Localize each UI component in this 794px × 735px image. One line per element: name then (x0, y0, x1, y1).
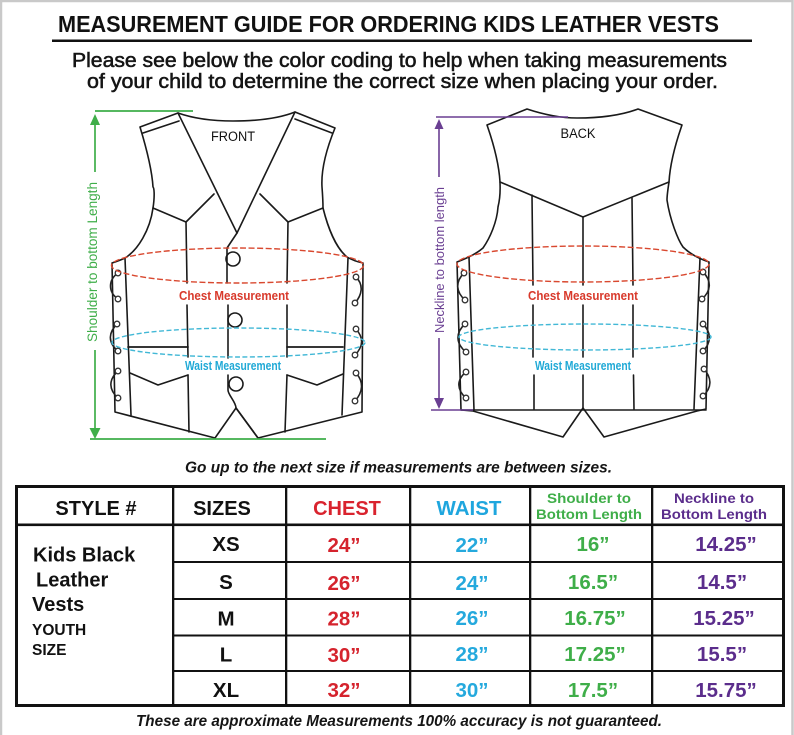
vest front side laces (110, 270, 362, 404)
size table (15, 485, 785, 707)
table header row: Bottom Length (661, 506, 767, 522)
shoulder length column: 17.5” (568, 679, 618, 702)
shoulder to bottom arrow (85, 111, 326, 439)
waist column: 28” (455, 643, 489, 666)
chest column (327, 534, 361, 702)
table header row: SIZES (193, 498, 251, 520)
neckline length column: 14.5” (697, 571, 747, 594)
chest column: 24” (327, 534, 361, 557)
table header row: WAIST (437, 497, 502, 520)
label: BACK: BACK (560, 126, 596, 141)
vest back outline (457, 109, 709, 437)
style description: Leather (36, 570, 108, 592)
chest column: 32” (327, 679, 361, 702)
chest column: 28” (327, 608, 361, 630)
waist column: 24” (455, 572, 489, 595)
sizes column: XS (212, 533, 240, 556)
shoulder length column: 16.5” (568, 571, 618, 594)
note: go up a size: Go up to the next size if measurements are between sizes. (185, 460, 612, 476)
table header row (55, 490, 767, 522)
style description (32, 544, 136, 659)
footnote: These are approximate Measurements 100% accuracy is not guaranteed. (136, 713, 662, 730)
waist measure back (459, 324, 711, 373)
subtitle text: Please see below the color coding to help when taking measurements (72, 50, 727, 72)
sizes column: M (217, 608, 235, 630)
style description: Vests (32, 594, 84, 616)
waist column (455, 534, 489, 702)
neckline to bottom arrow (431, 117, 568, 410)
sizes column: XL (213, 679, 239, 702)
sizes column (212, 533, 240, 702)
waist column: 30” (455, 679, 489, 702)
neckline length column: 15.25” (693, 607, 755, 630)
chest column: 26” (327, 572, 361, 595)
waist measure front: Waist Measurement (185, 358, 282, 373)
sizes column: L (220, 644, 232, 666)
neckline length column: 15.75” (695, 679, 757, 702)
waist column: 26” (455, 607, 489, 630)
waist measure front (112, 328, 365, 373)
shoulder to bottom arrow: Shoulder to bottom Length (85, 182, 100, 342)
table header row: Neckline to (674, 490, 754, 506)
chest measure back: Chest Measurement (528, 288, 639, 303)
vest front outline (112, 112, 363, 438)
table header row: Shoulder to (547, 490, 631, 506)
chest measure front: Chest Measurement (179, 288, 290, 303)
vest back side laces (458, 269, 710, 401)
diagram: front vest (85, 111, 365, 439)
shoulder length column: 17.25” (564, 643, 626, 666)
shoulder length column: 16” (576, 533, 610, 556)
waist column: 22” (455, 534, 489, 557)
subtitle text (72, 50, 727, 93)
table grid (15, 485, 785, 707)
waist measure back: Waist Measurement (535, 358, 632, 373)
style description: YOUTH (32, 622, 86, 639)
subtitle text: of your child to determine the correct size when placing your order. (87, 71, 718, 93)
sizes column: S (219, 571, 233, 594)
label: FRONT: FRONT (211, 129, 255, 144)
chest column: 30” (327, 644, 361, 667)
table header row: Bottom Length (536, 506, 642, 522)
shoulder length column: 16.75” (564, 607, 626, 630)
table header row: CHEST (313, 498, 381, 520)
neckline to bottom arrow: Neckline to bottom length (432, 187, 447, 333)
shoulder length column (564, 533, 626, 702)
neckline length column: 14.25” (695, 533, 757, 556)
chest measure front (112, 248, 364, 303)
table header row: STYLE # (55, 498, 137, 520)
style description: Kids Black (33, 544, 136, 566)
diagram: back vest (431, 109, 711, 437)
style description: SIZE (32, 642, 66, 659)
title: MEASUREMENT GUIDE FOR ORDERING KIDS LEATHER VESTS (58, 11, 719, 37)
chest measure back (457, 246, 709, 303)
neckline length column (693, 533, 757, 702)
vest front buttons (226, 252, 243, 391)
neckline length column: 15.5” (697, 643, 747, 666)
